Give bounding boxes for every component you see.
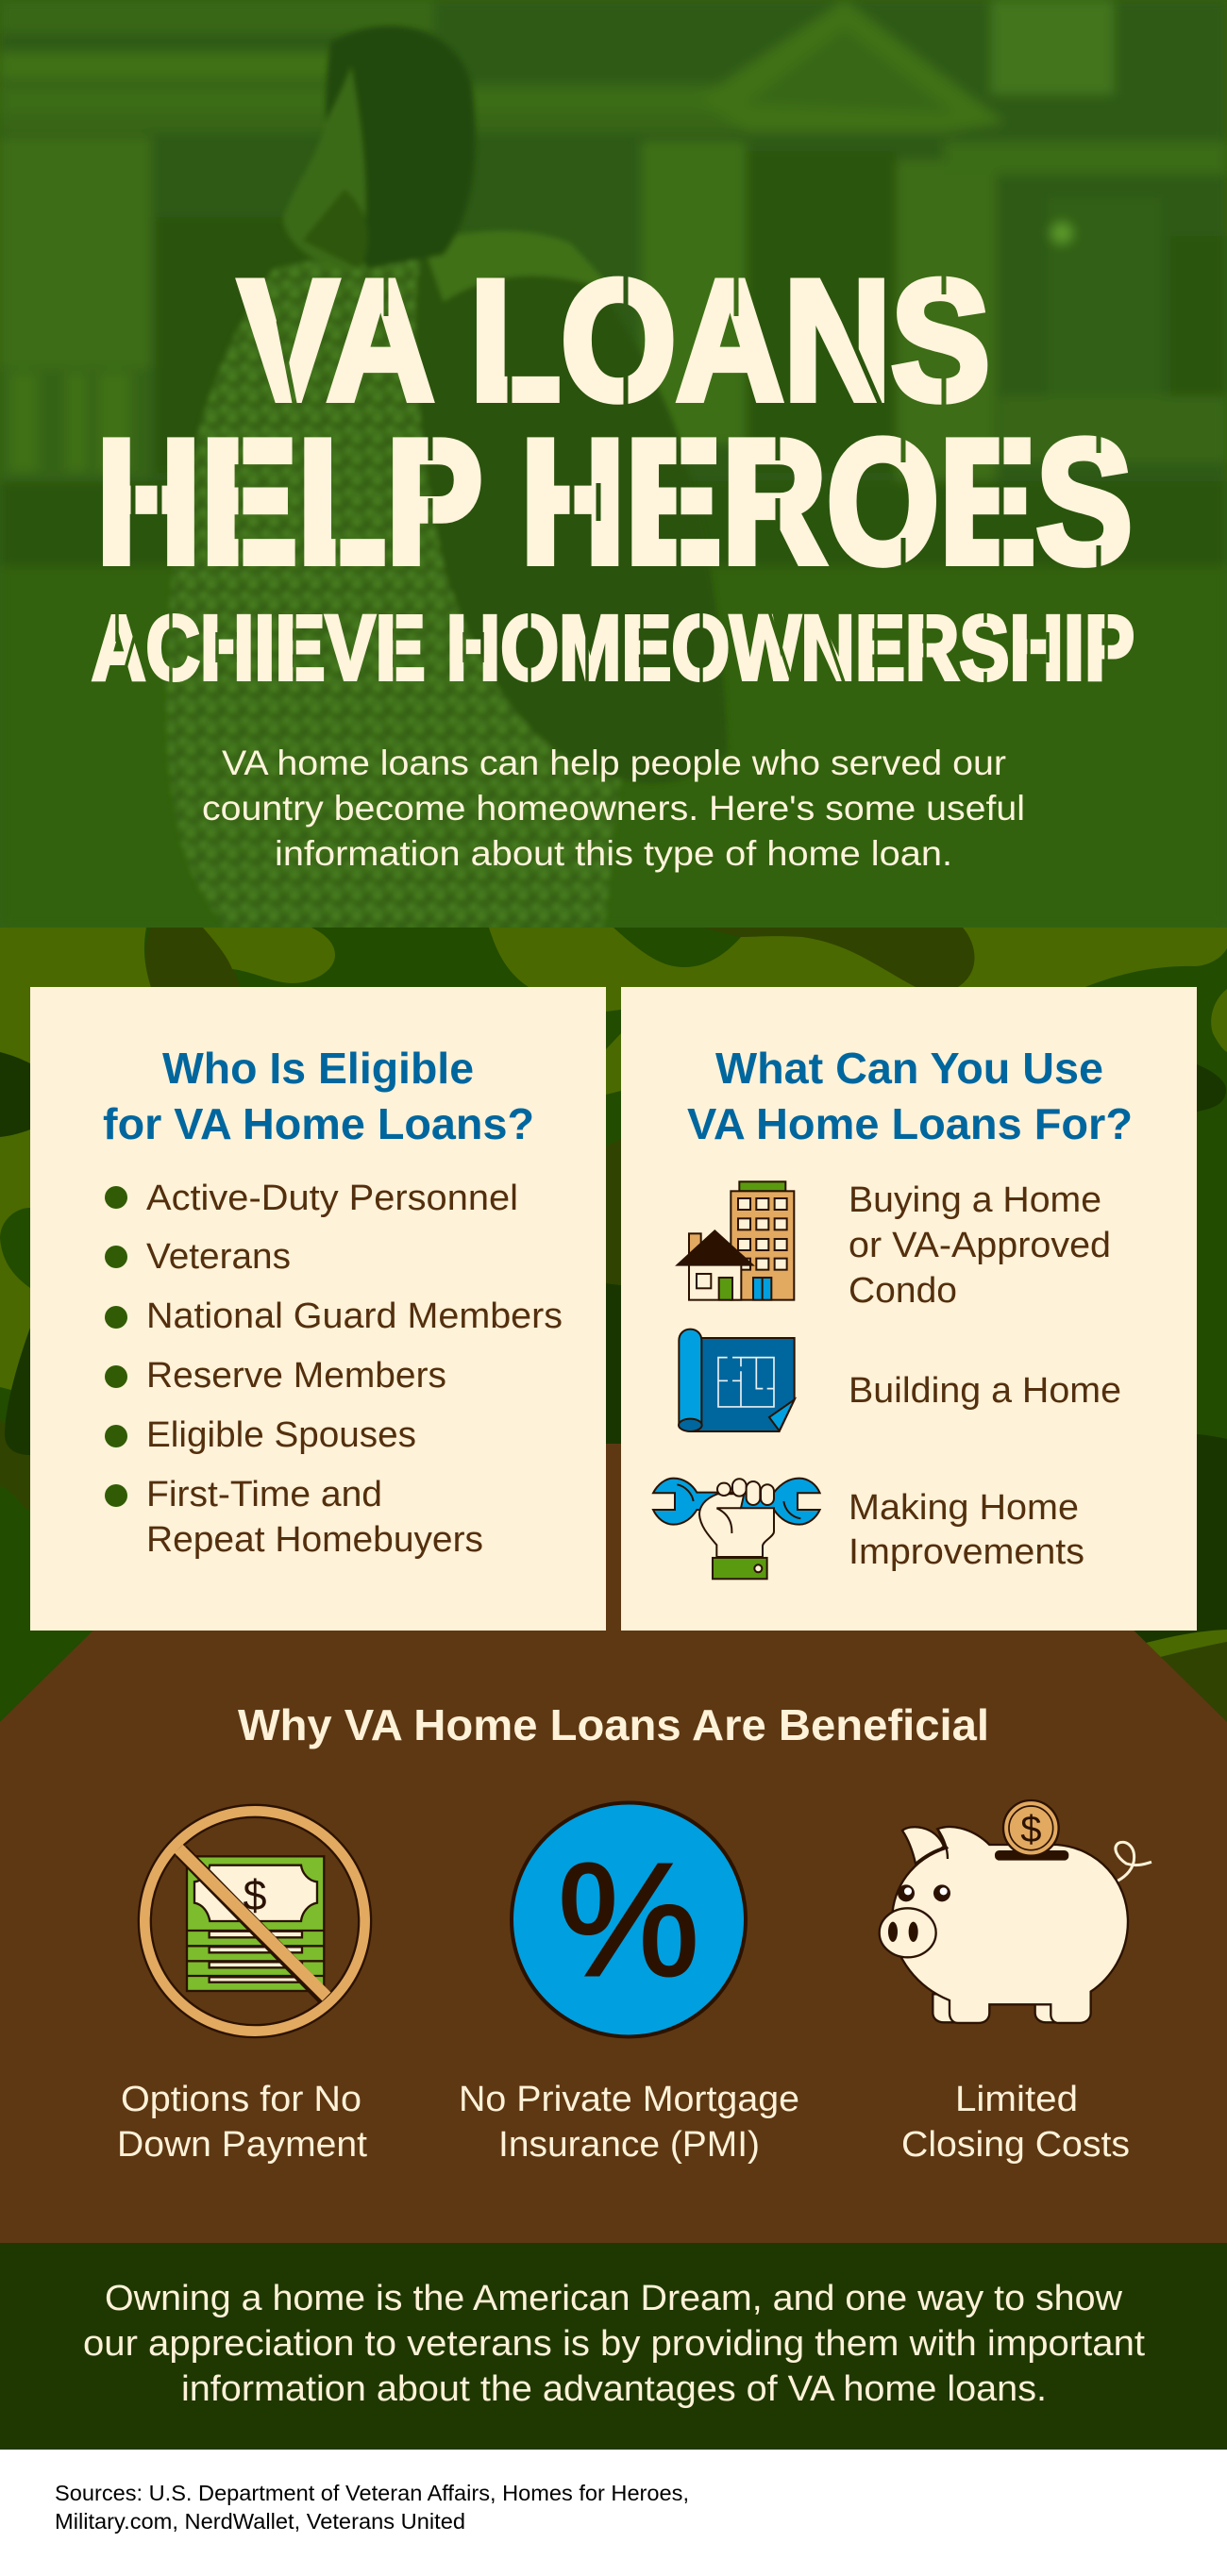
camouflage background	[0, 928, 1227, 1731]
eligibility list: Active-Duty Personnel	[146, 1179, 518, 1218]
benefit labels: Insurance (PMI)	[498, 2125, 760, 2165]
eligibility list: Veterans	[146, 1237, 291, 1277]
sources footer: Military.com, NerdWallet, Veterans United	[55, 2509, 465, 2534]
icon: buildings	[678, 1181, 794, 1300]
eligibility list: Repeat Homebuyers	[146, 1520, 483, 1560]
benefit labels: Options for No	[121, 2080, 361, 2119]
benefit labels: No Private Mortgage	[459, 2080, 799, 2119]
soldier figure	[167, 26, 728, 928]
benefit labels: Closing Costs	[901, 2125, 1130, 2165]
usage list text: Improvements	[849, 1532, 1084, 1572]
intro text: information about this type of home loan.	[275, 834, 952, 873]
usage list text: Buying a Home	[849, 1180, 1101, 1220]
intro text: country become homeowners. Here's some useful	[202, 789, 1025, 828]
closing statement band: our appreciation to veterans is by providing them with important	[83, 2324, 1145, 2364]
intro text	[202, 744, 1025, 873]
icon: hand holding wrench	[653, 1479, 820, 1579]
title: VA Loans Help Heroes Achieve Homeownership	[91, 276, 1134, 682]
usage list text: Condo	[849, 1271, 957, 1311]
heading: who is eligible: for VA Home Loans?	[103, 1099, 534, 1148]
benefit labels: Down Payment	[117, 2125, 367, 2165]
eligibility list: First-Time and	[146, 1475, 382, 1514]
usage list text: or VA-Approved	[849, 1226, 1111, 1265]
sources footer	[0, 2450, 1227, 2576]
icon: no cash	[144, 1811, 365, 2032]
icon: percent	[512, 1802, 746, 2036]
usage list text: Building a Home	[849, 1371, 1121, 1411]
heading: what can you use	[687, 1044, 1133, 1148]
intro text: VA home loans can help people who served our	[222, 744, 1006, 782]
heading: what can you use: VA Home Loans For?	[687, 1099, 1133, 1148]
icon: percent: %	[558, 1831, 699, 2010]
heading: who is eligible	[103, 1044, 534, 1148]
header photo background	[0, 0, 1227, 928]
benefit labels	[117, 2080, 1130, 2165]
closing statement band: information about the advantages of VA home loans.	[181, 2369, 1047, 2409]
icon: no cash: $	[243, 1871, 267, 1919]
closing statement band	[0, 2243, 1227, 2450]
eligibility list	[105, 1179, 563, 1560]
panel: what can you use	[621, 987, 1197, 1631]
heading: who is eligible: Who Is Eligible	[162, 1044, 474, 1093]
icon: piggy bank	[880, 1800, 1151, 2023]
benefit labels: Limited	[955, 2080, 1078, 2119]
eligibility list: Eligible Spouses	[146, 1415, 416, 1455]
eligibility list: Reserve Members	[146, 1356, 446, 1396]
panel: who is eligible	[30, 987, 606, 1631]
usage list text: Making Home	[849, 1488, 1079, 1528]
closing statement band: Owning a home is the American Dream, and one way to show	[105, 2279, 1123, 2318]
benefits heading: Why VA Home Loans Are Beneficial	[238, 1700, 989, 1749]
icon: piggy bank: $	[1020, 1809, 1041, 1850]
brown benefits panel background	[0, 1444, 1227, 2244]
icon: blueprint	[679, 1330, 795, 1431]
usage list text	[849, 1180, 1121, 1572]
sources footer: Sources: U.S. Department of Veteran Affairs, Homes for Heroes,	[55, 2481, 689, 2505]
heading: what can you use: What Can You Use	[715, 1044, 1103, 1093]
title: VA Loans Help Heroes Achieve Homeownership: VA LOANS	[239, 245, 990, 436]
eligibility list: National Guard Members	[146, 1296, 563, 1336]
